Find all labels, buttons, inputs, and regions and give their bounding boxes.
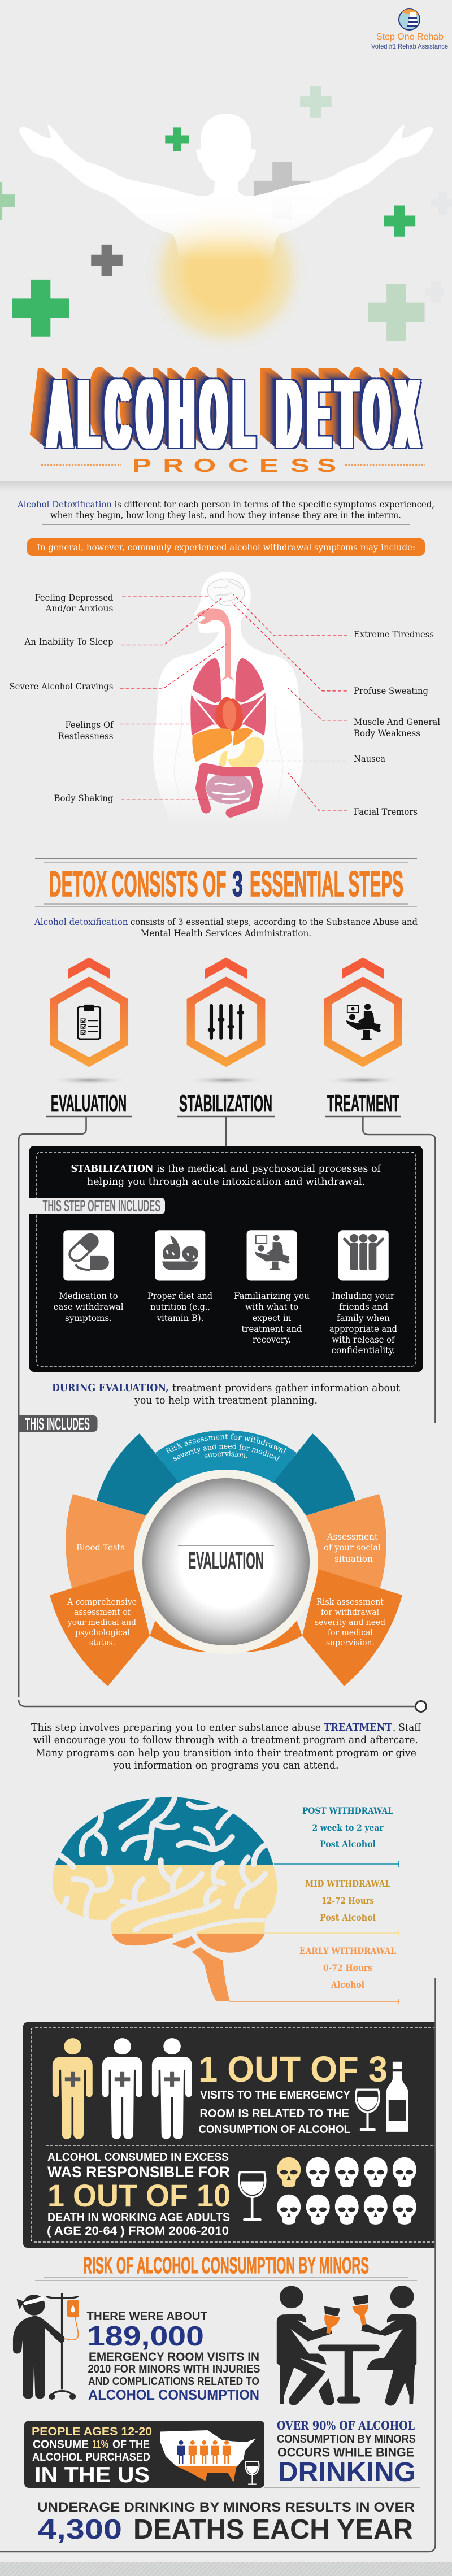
steps intro paragraph: consists of 3 essential steps, according to the Substance Abuse and	[131, 916, 418, 927]
intro paragraph: when they begin, how long they last, and how they intense they are in the interim.	[50, 510, 401, 520]
steps intro paragraph	[34, 916, 418, 939]
segment text: left and right: for withdrawal	[321, 1607, 379, 1617]
anatomy figure with organs	[153, 572, 303, 827]
icon: US map with people and glass	[156, 2429, 259, 2485]
withdrawal timeline: early: Alcohol	[331, 1979, 364, 1990]
panel: 11% of alcohol purchased: 11%	[92, 2439, 108, 2451]
segment text: left and right: for medical	[328, 1627, 373, 1637]
step descriptions: vitamin B).	[157, 1313, 203, 1323]
symptom labels: An Inability To Sleep	[24, 636, 113, 647]
stat: 4,300 deaths each year: DEATHS EACH YEAR	[133, 2514, 413, 2545]
hero figure with arms raised and glowing torso	[19, 114, 433, 352]
floating medical crosses	[0, 86, 452, 341]
stat: over 90% binge drinking	[277, 2418, 416, 2487]
during evaluation paragraph: you to help with treatment planning.	[134, 1395, 318, 1406]
icon: three people, one highlighted	[53, 2038, 192, 2139]
panel: stabilization	[29, 1146, 423, 1372]
tab: this includes	[19, 1415, 97, 1433]
process subtitle with dotted rules: PROCESS	[132, 455, 336, 476]
stat: 1 out of 10: 1 OUT OF 10	[47, 2178, 231, 2213]
stat: 1 out of 3: 1 OUT OF 3	[198, 2049, 388, 2090]
segment text: left and right: Assessment	[327, 1532, 379, 1542]
treatment paragraph: . Staff	[393, 1722, 421, 1734]
symptom leader lines	[120, 594, 347, 811]
segment text: left and right: Blood Tests	[76, 1543, 125, 1553]
panel: 11% of alcohol purchased: OF THE	[112, 2439, 150, 2451]
stabilization description: helping you through acute intoxication and withdrawal.	[87, 1176, 365, 1188]
logo: Step One Rehab: Voted #1 Rehab Assistance	[371, 44, 448, 50]
panel: 11% of alcohol purchased: CONSUME	[33, 2439, 89, 2451]
step descriptions: ease withdrawal	[53, 1302, 124, 1312]
steps intro paragraph: Mental Health Services Administration.	[141, 928, 311, 939]
treatment paragraph: you information on programs you can attend.	[113, 1760, 339, 1771]
stabilization description	[71, 1163, 381, 1188]
heading: detox consists of 3 essential steps: 3	[232, 865, 243, 904]
step descriptions: confidentiality.	[331, 1345, 395, 1356]
segment text: left and right: of your social	[324, 1543, 381, 1553]
during evaluation paragraph	[52, 1382, 401, 1406]
symptom labels: Body Weakness	[354, 728, 420, 739]
withdrawal timeline: early: 0-72 Hours	[323, 1962, 372, 1973]
stat: 4,300 deaths each year: UNDERAGE DRINKING BY MINORS RESULTS IN OVER	[37, 2500, 415, 2515]
segment text: left and right: Risk assessment	[316, 1597, 384, 1607]
icon: ten skulls, one highlighted	[277, 2157, 416, 2225]
stat: 189,000 emergency room visits: ALCOHOL CONSUMPTION	[88, 2387, 259, 2403]
stabilization description: is the medical and psychosocial processes of	[157, 1163, 381, 1175]
symptom labels: Profuse Sweating	[354, 685, 428, 696]
stat: 1 out of 3: CONSUMPTION OF ALCOHOL	[199, 2123, 350, 2136]
symptom labels: Facial Tremors	[354, 806, 418, 817]
stat: 189,000 emergency room visits: AND COMPLICATIONS RELATED TO	[88, 2375, 259, 2388]
icon tile: diet	[155, 1230, 205, 1280]
step descriptions: Medication to	[59, 1291, 118, 1301]
step descriptions: Proper diet and	[147, 1291, 212, 1301]
orange banner: In general, however, commonly experienced alcohol withdrawal symptoms may include:	[37, 542, 415, 553]
treatment paragraph: TREATMENT	[324, 1722, 393, 1734]
intro paragraph: Alcohol Detoxification	[17, 499, 112, 510]
icon tile: doctor and patient	[247, 1230, 297, 1280]
segment text: left and right: your medical and	[67, 1617, 136, 1627]
brain withdrawal diagram	[53, 1797, 277, 2001]
step descriptions	[53, 1291, 397, 1356]
during evaluation paragraph: DURING EVALUATION,	[52, 1382, 168, 1394]
icon: patient with IV drip	[13, 2293, 79, 2400]
orange banner	[27, 538, 425, 556]
withdrawal timeline: post: POST WITHDRAWAL	[302, 1805, 393, 1816]
treatment paragraph	[31, 1722, 421, 1771]
step: evaluation hexagon	[49, 957, 129, 1084]
right connector line and closing edge	[0, 1978, 435, 2552]
withdrawal timeline: post: 2 week to 2 year	[312, 1822, 384, 1833]
symptom labels: Feeling Depressed	[35, 592, 113, 603]
symptom labels	[9, 592, 440, 817]
stat: over 90% binge drinking: OCCURS WHILE BINGE	[277, 2445, 414, 2459]
step descriptions: Familiarizing you	[234, 1291, 310, 1301]
step descriptions: Including your	[332, 1291, 395, 1301]
step descriptions: treatment and	[242, 1324, 302, 1334]
intro paragraph	[17, 499, 434, 525]
panel: 11% of alcohol purchased	[24, 2421, 420, 2488]
stat: 189,000 emergency room visits: EMERGENCY ROOM VISITS IN	[89, 2351, 259, 2364]
withdrawal timeline: mid	[264, 1878, 399, 1936]
icon: two people drinking at a table	[277, 2286, 416, 2405]
evaluation connector end with circle	[19, 1700, 426, 1712]
step descriptions: family when	[337, 1313, 390, 1323]
segment text: left and right: assessment of	[74, 1607, 131, 1617]
steps intro paragraph: Alcohol detoxification	[34, 916, 128, 927]
tab: this includes: THIS INCLUDES	[25, 1415, 90, 1433]
symptom labels: Nausea	[354, 753, 385, 764]
icon tile: medication	[63, 1230, 114, 1280]
step descriptions: with release of	[332, 1335, 395, 1345]
intro paragraph: is different for each person in terms of the specific symptoms experienced,	[114, 499, 434, 510]
symptom labels: And/or Anxious	[45, 603, 113, 614]
stat: 189,000 emergency room visits	[87, 2310, 260, 2403]
step: treatment hexagon	[323, 957, 403, 1084]
stat: 1 out of 3: ROOM IS RELATED TO THE	[200, 2108, 349, 2120]
tab: this step often includes: THIS STEP OFTEN INCLUDES	[43, 1197, 160, 1215]
tab: this step often includes	[29, 1197, 165, 1215]
evaluation wheel diagram	[50, 1430, 402, 1686]
header bottom shadow	[0, 481, 452, 492]
step descriptions: expect in	[252, 1313, 292, 1323]
stat: 1 out of 3: VISITS TO THE EMERGEMCY	[200, 2089, 351, 2101]
step descriptions: nutrition (e.g.,	[150, 1302, 210, 1312]
segment text: left and right: psychological	[75, 1627, 130, 1637]
withdrawal timeline: mid: Post Alcohol	[320, 1912, 376, 1923]
step: stabilization hexagon	[186, 957, 266, 1084]
step descriptions: appropriate and	[329, 1324, 397, 1334]
withdrawal timeline: early: EARLY WITHDRAWAL	[299, 1945, 396, 1956]
symptom labels: Extreme Tiredness	[354, 629, 434, 640]
stabilization description: STABILIZATION	[71, 1163, 154, 1175]
segment text: left and right: status.	[89, 1637, 115, 1648]
segment text: left and right: supervision.	[326, 1637, 375, 1648]
icon: wine glass	[239, 2173, 266, 2221]
step labels	[46, 1090, 401, 1117]
panel: 11% of alcohol purchased: PEOPLE AGES 12-20	[32, 2425, 152, 2438]
step labels: EVALUATION	[51, 1090, 127, 1117]
stat: 4,300 deaths each year	[37, 2500, 415, 2545]
panel: 11% of alcohol purchased: ALCOHOL PURCHASED	[32, 2451, 150, 2464]
symptom labels: Body Shaking	[54, 793, 113, 803]
withdrawal timeline: post: Post Alcohol	[320, 1839, 376, 1849]
curved text on top segment: severity and need for medical	[173, 1443, 280, 1461]
logo: Step One Rehab: Step One Rehab	[376, 32, 444, 42]
heading: detox consists of 3 essential steps: DETOX CONSISTS OF	[49, 865, 226, 904]
stat: 1 out of 10: WAS RESPONSIBLE FOR	[47, 2164, 230, 2180]
stat: 1 out of 3	[198, 2049, 388, 2136]
title: alcohol detox: ALCOHOL DETOX	[48, 359, 426, 468]
treatment paragraph: Many programs can help you transition into their treatment program or give	[36, 1747, 416, 1759]
curved text on top segment: supervision.	[205, 1451, 247, 1459]
stat: 189,000 emergency room visits: 2010 FOR MINORS WITH INJURIES	[88, 2363, 260, 2375]
withdrawal timeline: post	[274, 1805, 399, 1867]
symptom labels: Feelings Of	[66, 719, 114, 730]
wheel segment: dark teal left	[97, 1433, 178, 1515]
segment text: left and right: A comprehensive	[67, 1597, 137, 1607]
step descriptions: recovery.	[253, 1335, 291, 1345]
stat: over 90% binge drinking: DRINKING	[278, 2457, 416, 2487]
stat: over 90% binge drinking: CONSUMPTION BY MINORS	[277, 2433, 416, 2445]
evaluation wheel diagram: EVALUATION	[188, 1547, 264, 1574]
stat: 1 out of 10	[47, 2152, 231, 2238]
treatment paragraph: will encourage you to follow through with a treatment program and aftercare.	[33, 1734, 418, 1746]
withdrawal timeline: mid: MID WITHDRAWAL	[305, 1878, 390, 1889]
icon tile: friends and family	[338, 1230, 389, 1280]
stat: 4,300 deaths each year: 4,300	[38, 2514, 122, 2545]
segment text: left and right: situation	[334, 1554, 373, 1564]
step labels: STABILIZATION	[179, 1090, 272, 1117]
withdrawal timeline: early	[229, 1945, 399, 2004]
stat: 1 out of 10: DEATH IN WORKING AGE ADULTS	[47, 2211, 230, 2224]
during evaluation paragraph: treatment providers gather information about	[172, 1382, 401, 1394]
stat: 1 out of 10: ( AGE 20-64 ) FROM 2006-2010	[47, 2225, 229, 2238]
symptom labels: Severe Alcohol Cravings	[9, 681, 113, 692]
footer hatch band	[0, 2562, 452, 2576]
logo: Step One Rehab	[371, 9, 448, 50]
stat: over 90% binge drinking: OVER 90% OF ALCOHOL	[277, 2418, 415, 2432]
stat: 189,000 emergency room visits: THERE WERE ABOUT	[87, 2310, 207, 2323]
step descriptions: friends and	[339, 1302, 388, 1312]
symptom labels: Muscle And General	[354, 716, 440, 727]
step descriptions: symptoms.	[65, 1313, 112, 1323]
step connector lines	[19, 1117, 435, 1697]
icon: wine glass and bottle	[356, 2062, 408, 2132]
segment text: left and right: severity and need	[315, 1617, 385, 1627]
panel: 11% of alcohol purchased: IN THE US	[34, 2463, 150, 2487]
stat: 1 out of 10: ALCOHOL CONSUMED IN EXCESS	[47, 2152, 229, 2164]
symptom labels: Restlessness	[58, 731, 113, 741]
panel: emergency room and death statistics	[23, 2022, 436, 2248]
stat: 189,000 emergency room visits: 189,000	[87, 2321, 204, 2352]
segment text: left and right	[67, 1532, 385, 1648]
curved text on top segment: Risk assessment for withdrawal	[165, 1434, 286, 1454]
step descriptions: with what to	[245, 1302, 298, 1312]
treatment paragraph: This step involves preparing you to enter substance abuse	[31, 1722, 321, 1734]
withdrawal timeline: mid: 12-72 Hours	[321, 1895, 374, 1906]
